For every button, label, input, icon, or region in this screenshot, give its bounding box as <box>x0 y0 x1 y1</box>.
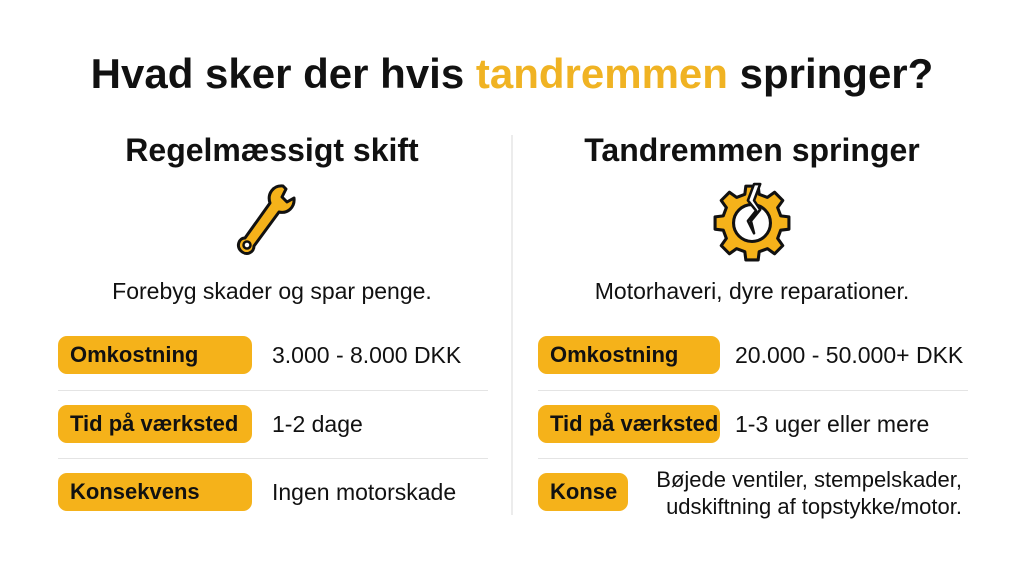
row: cost right: 20.000 - 50.000+ DKK <box>735 342 963 368</box>
row: time left: Tid på værksted <box>70 411 238 436</box>
row: cost right: Omkostning <box>550 342 678 367</box>
row: cost left <box>58 336 461 374</box>
title: Hvad sker der hvis tandremmen springer? <box>91 50 933 97</box>
row: time left <box>58 405 363 443</box>
row: consequence right <box>538 467 962 519</box>
subtitle right: Motorhaveri, dyre reparationer. <box>595 278 909 304</box>
row: time left: 1-2 dage <box>272 411 363 437</box>
row: time right: 1-3 uger eller mere <box>735 411 929 437</box>
row: consequence right: udskiftning af topstykke/motor. <box>666 494 962 519</box>
row: cost left: Omkostning <box>70 342 198 367</box>
row: consequence left <box>58 473 456 511</box>
row: time right: Tid på værksted <box>550 411 718 436</box>
subtitle left: Forebyg skader og spar penge. <box>112 278 432 304</box>
row: cost right <box>538 336 963 374</box>
row: consequence right: Konse <box>550 479 617 504</box>
heading left: Regelmæssigt skift <box>125 132 419 168</box>
row: consequence left: Konsekvens <box>70 479 200 504</box>
row: consequence right: Bøjede ventiler, stempelskader, <box>656 467 962 492</box>
row: cost left: 3.000 - 8.000 DKK <box>272 342 461 368</box>
row: time right <box>538 405 929 443</box>
icon: broken gear <box>714 182 790 262</box>
row: consequence left: Ingen motorskade <box>272 479 456 505</box>
heading right: Tandremmen springer <box>584 132 920 168</box>
icon: wrench <box>236 184 296 255</box>
